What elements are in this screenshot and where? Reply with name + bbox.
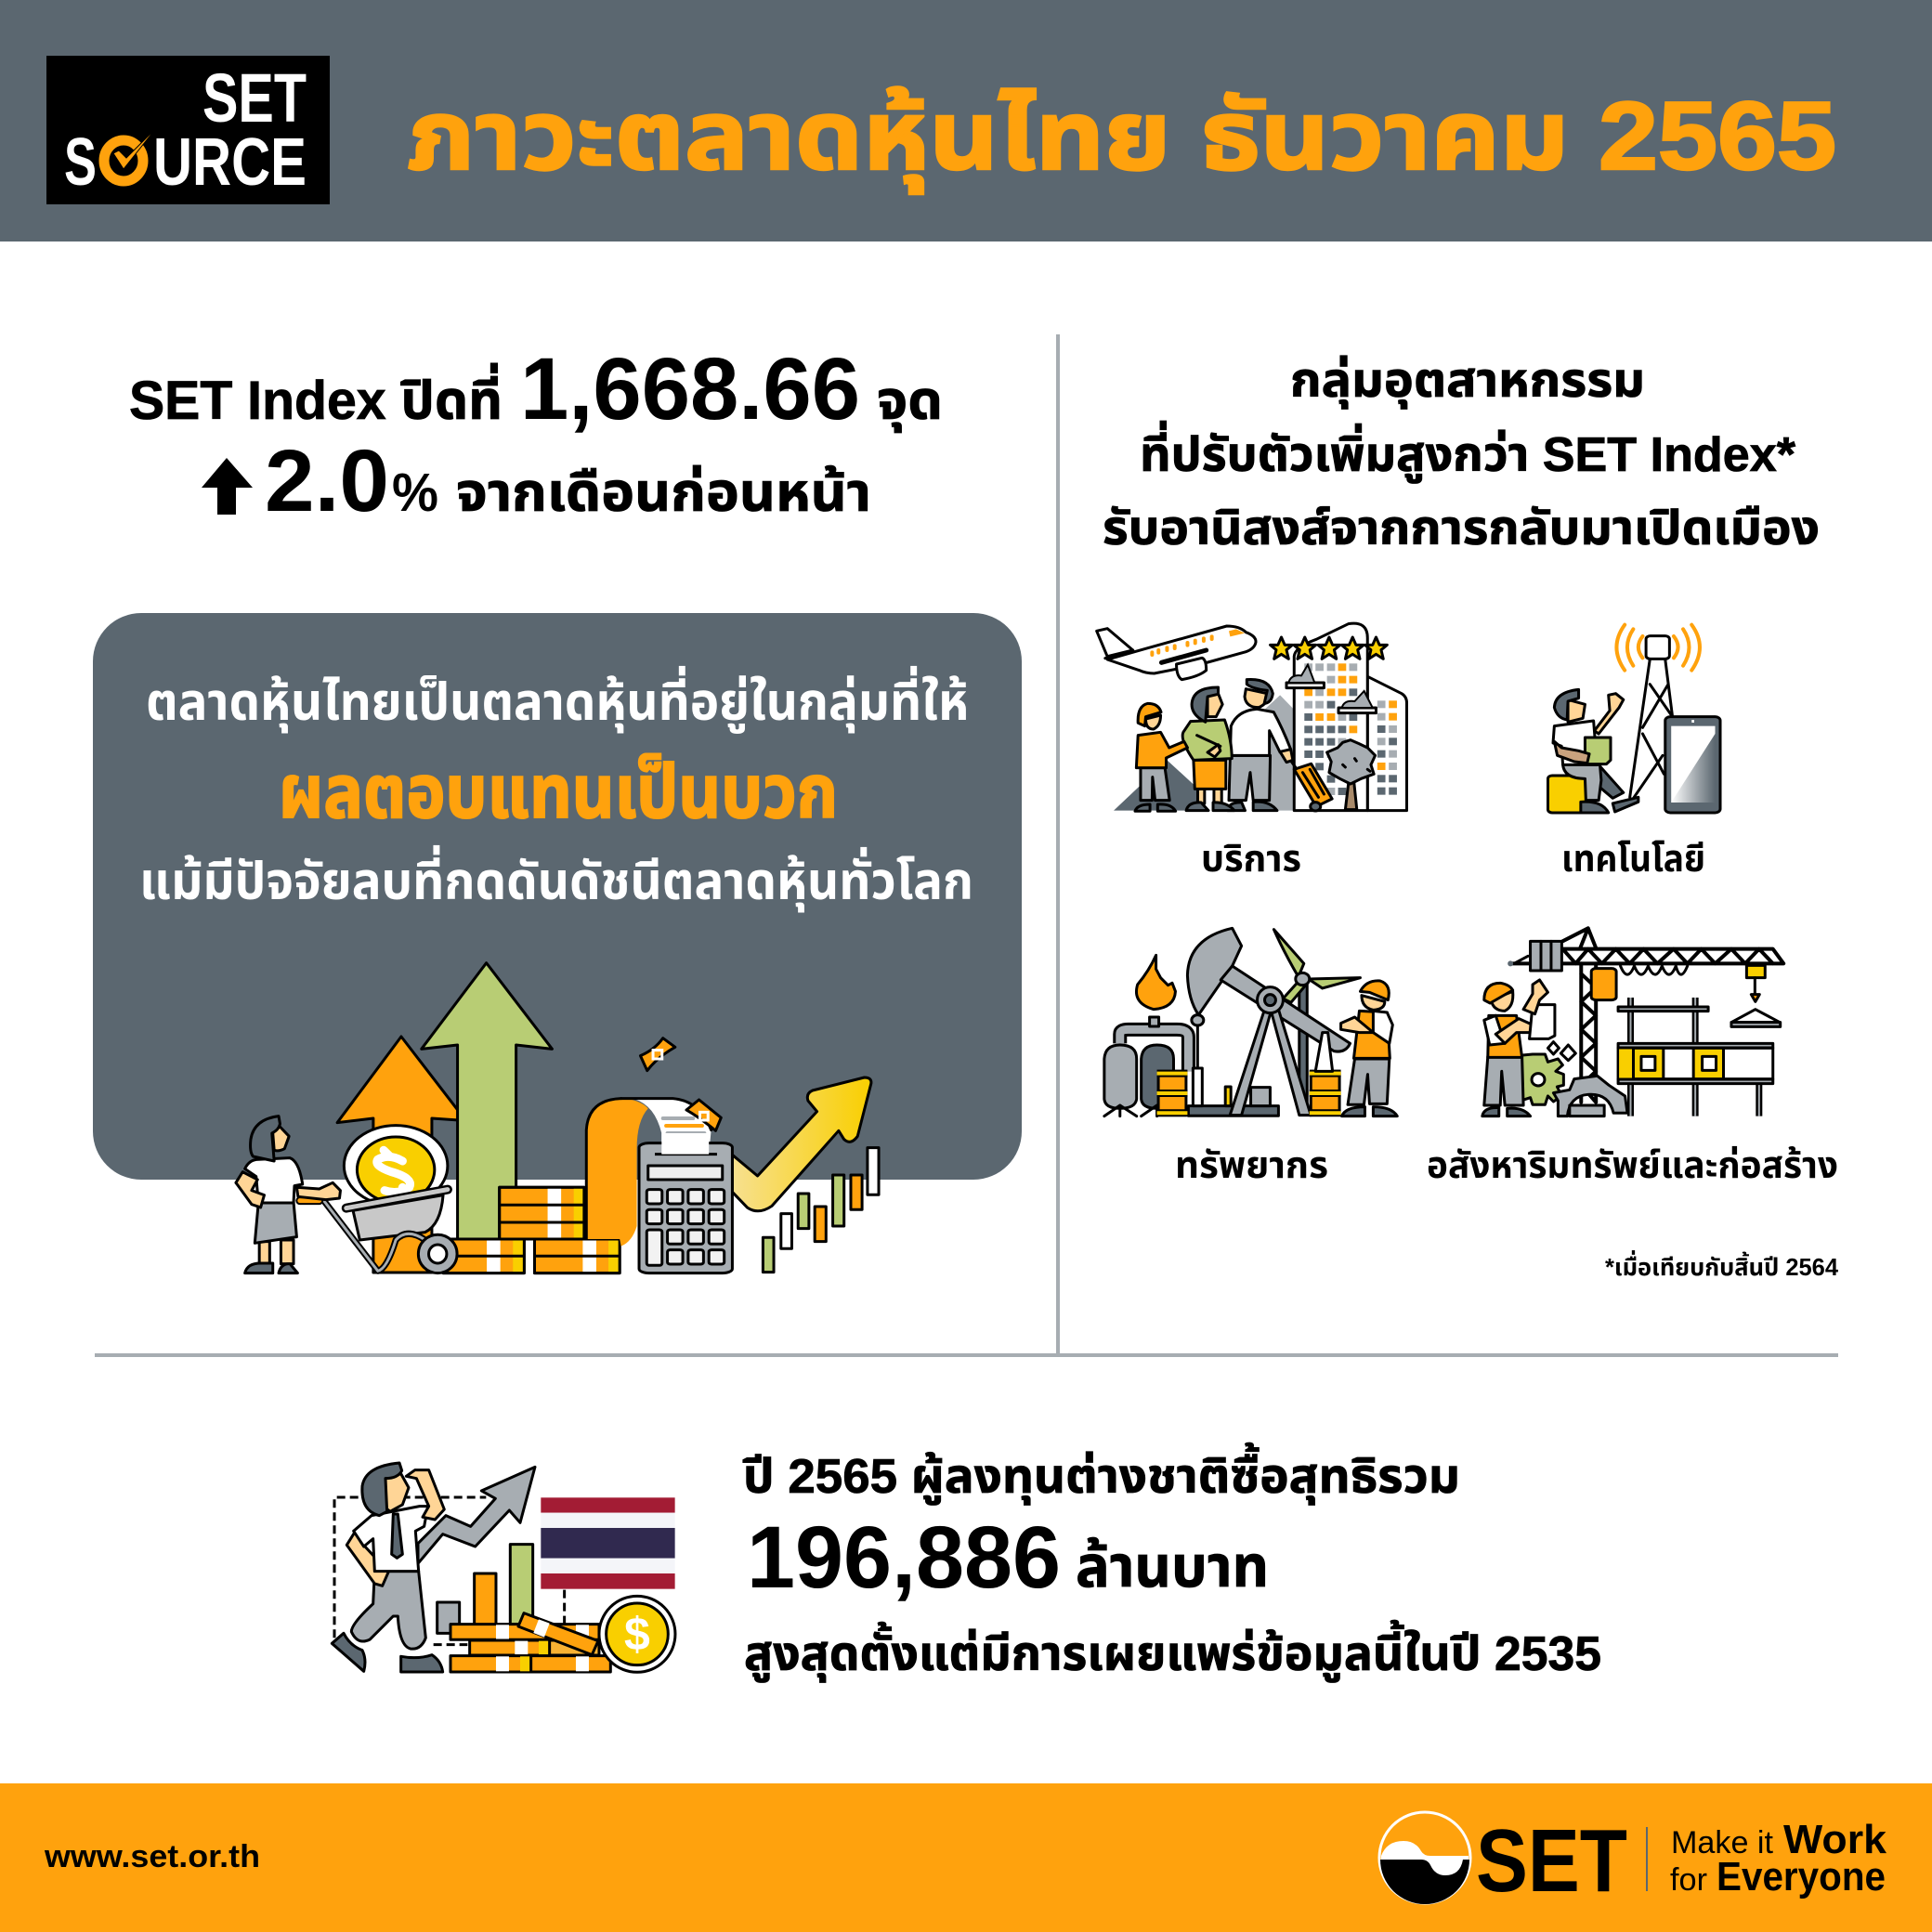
flame (1136, 955, 1175, 1010)
statement: foreign investors: ปี 2565 ผู้ลงทุนต่างชาติซื้อสุทธิรวม (742, 1442, 1460, 1506)
airplane (1097, 626, 1256, 680)
person with laptop (1547, 689, 1638, 813)
monthly change line (202, 432, 871, 530)
icon: technology (1547, 625, 1720, 813)
tree (1327, 740, 1376, 810)
logo: SET: SET (1476, 1811, 1627, 1911)
SET Index headline: จุด (877, 371, 943, 433)
panel text (139, 665, 973, 913)
heading: industry groups: กลุ่มอุตสาหกรรม (1290, 354, 1645, 409)
receipt paper (586, 1099, 711, 1247)
child (1135, 703, 1187, 811)
label: real estate and construction: อสังหาริมทรัพย์และก่อสร้าง (1427, 1144, 1838, 1186)
icon: real estate and construction (1482, 928, 1783, 1116)
logo: SET Source (46, 56, 330, 204)
icon: up arrow (202, 458, 253, 515)
orange arrow (337, 1037, 459, 1273)
coin stacks (450, 1613, 610, 1672)
illustration: woman with wheelbarrow, arrows, coins and calculator (236, 963, 879, 1273)
calculator (639, 1133, 732, 1273)
panel text: ตลาดหุ้นไทยเป็นตลาดหุ้นที่อยู่ในกลุ่มที่ให้ (146, 665, 969, 734)
label: technology: เทคโนโลยี (1561, 839, 1705, 880)
panel: Thai market message (93, 613, 1022, 1180)
label: services: บริการ (1201, 839, 1301, 880)
smartphone (1665, 717, 1720, 813)
heading: industry groups: ที่ปรับตัวเพิ่มสูงกว่า SET Index* (1140, 421, 1796, 484)
divider vertical (1056, 334, 1060, 1354)
candlestick bars (763, 1148, 879, 1273)
heading: industry groups: รับอานิสงส์จากการกลับมาเปิดเมือง (1103, 502, 1820, 555)
title: ภาวะตลาดหุ้นไทย ธันวาคม 2565 (407, 83, 1836, 194)
statement: foreign investors: สูงสุดตั้งแต่มีการเผยแพร่ข้อมูลนี้ในปี 2535 (744, 1620, 1601, 1683)
oil barrels (1157, 1033, 1341, 1116)
footer band (0, 1783, 1932, 1932)
hotel buildings (1286, 623, 1407, 811)
pump jack (1187, 928, 1360, 1116)
coin (344, 1126, 448, 1206)
statement: foreign investors: ล้านบาท (1076, 1535, 1269, 1599)
dashed frame (334, 1497, 565, 1645)
bar chart (437, 1545, 533, 1633)
tagline: Everyone (1717, 1854, 1886, 1899)
flag of Thailand (541, 1497, 675, 1589)
illustration: investor with Thai flag, coins and chart (332, 1463, 675, 1672)
website: www.set.or.th (44, 1839, 260, 1874)
logo: SET Source: URCE (153, 125, 307, 200)
wheelbarrow (300, 1190, 457, 1273)
money stacks (443, 1187, 620, 1273)
monthly change line: % (392, 463, 438, 523)
statement: foreign investors: 196,886 (747, 1508, 1061, 1607)
signal waves (1616, 625, 1700, 671)
floating banknotes (640, 1038, 721, 1130)
mother (1182, 687, 1234, 811)
footnote: *เมื่อเทียบกับสิ้นปี 2564 (1605, 1250, 1839, 1281)
statement: foreign investors (742, 1442, 1601, 1683)
panel text: ผลตอบแทนเป็นบวก (279, 751, 838, 833)
worker with clipboard (1482, 980, 1555, 1116)
logo: SET Source: S (64, 125, 97, 200)
icon: services (1097, 623, 1407, 811)
icon: resources (1104, 928, 1397, 1116)
label: resources: ทรัพยากร (1175, 1145, 1328, 1186)
SET Index headline: SET Index ปิดที่ (129, 362, 503, 431)
tanks and pipes (1104, 1017, 1188, 1116)
tagline: Make it (1671, 1825, 1774, 1860)
tagline: for (1670, 1862, 1707, 1898)
tower (1630, 636, 1673, 797)
dollar coin: $ (624, 1609, 650, 1661)
heading: industry groups (1103, 354, 1820, 555)
header band (0, 0, 1932, 242)
green arrow (422, 963, 552, 1240)
tagline: Work (1783, 1817, 1887, 1862)
wind turbine (1273, 930, 1360, 1105)
monthly change line: 2.0 (265, 432, 389, 530)
scaffold frame (1618, 998, 1773, 1116)
mountains (1114, 760, 1199, 811)
divider horizontal (95, 1353, 1838, 1357)
gears (1517, 1042, 1627, 1116)
SET Index headline (129, 340, 943, 438)
father (1228, 680, 1293, 811)
tower crane (1508, 928, 1783, 1103)
woman (236, 1116, 340, 1273)
monthly change line: จากเดือนก่อนหน้า (456, 463, 871, 523)
logo: SET (1379, 1811, 1627, 1911)
suitcase (1270, 731, 1332, 811)
gray arrow (418, 1467, 535, 1563)
SET Index headline: 1,668.66 (520, 340, 860, 438)
five stars (1271, 637, 1387, 659)
panel text: แม้มีปัจจัยลบที่กดดันดัชนีตลาดหุ้นทั่วโลก (139, 844, 973, 913)
tagline (1646, 1817, 1887, 1899)
yellow growth arrow (732, 1077, 871, 1211)
logo: SET Source: SET (202, 59, 307, 137)
investor (332, 1463, 444, 1672)
dollar coin (599, 1596, 675, 1672)
worker (1341, 981, 1397, 1116)
